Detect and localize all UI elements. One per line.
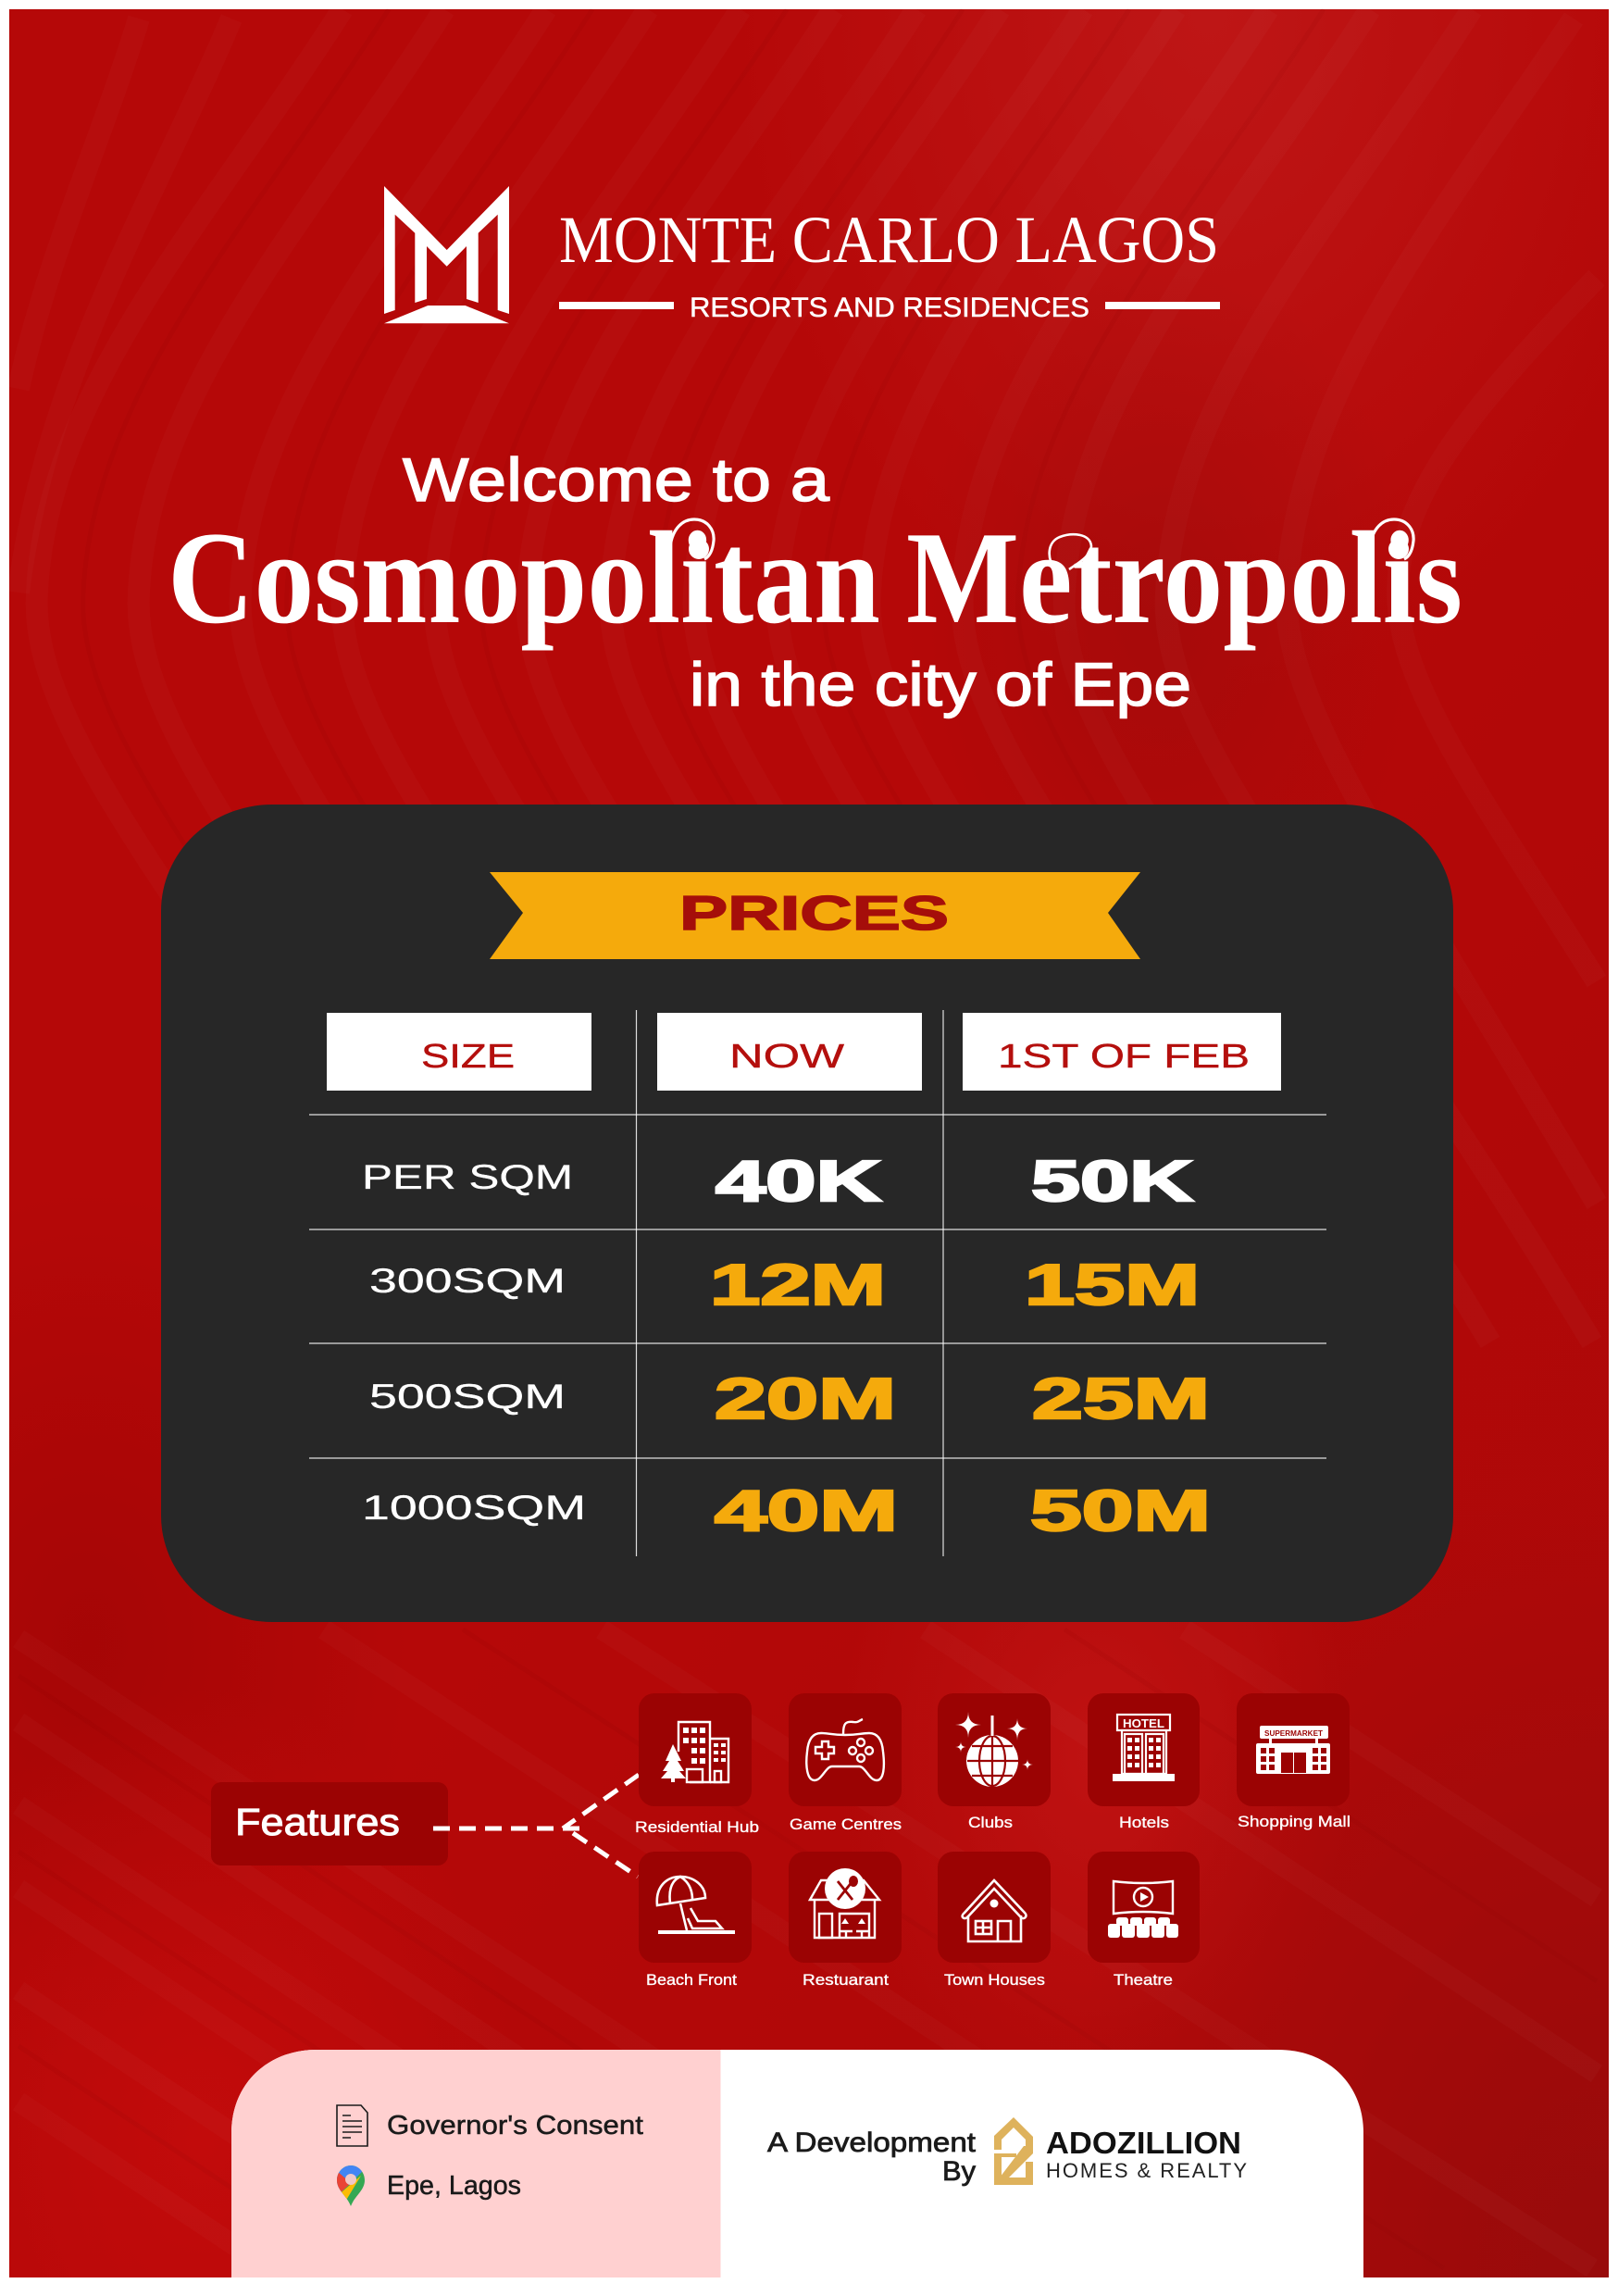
heading line: Welcome to a: Welcome to a — [403, 445, 829, 514]
table grid — [309, 1010, 1326, 1556]
row labels: 300SQM — [369, 1262, 566, 1300]
text: A Development By: By — [942, 2156, 976, 2187]
feature: Town Houses — [938, 1852, 1051, 1989]
feature: Theatre: Theatre — [1114, 1971, 1173, 1989]
feature: Hotels — [1088, 1693, 1200, 1831]
logo: Adozillion: HOMES & REALTY — [1046, 2159, 1247, 2182]
brand name: MONTE CARLO LAGOS — [559, 203, 1219, 277]
text: A Development By: A Development — [767, 2128, 977, 2158]
icon: map pin — [337, 2165, 365, 2206]
feature: Restuarant — [789, 1852, 902, 1989]
arrow: dashed connector — [433, 1775, 639, 1877]
per sqm prices: 40K — [716, 1150, 881, 1214]
banner: PRICES: PRICES — [679, 887, 949, 941]
feature: Residential Hub — [635, 1693, 759, 1836]
features label: Features — [235, 1801, 400, 1843]
plot prices: 50M — [1030, 1479, 1211, 1543]
feature: Town Houses: Town Houses — [944, 1971, 1045, 1989]
feature: Clubs: Clubs — [968, 1814, 1013, 1831]
feature: Residential Hub: Residential Hub — [635, 1818, 759, 1836]
feature: Shopping Mall — [1237, 1693, 1350, 1830]
panel: prices — [161, 805, 1453, 1622]
title: Cosmopolitan Metropolis: Cosmopolitan — [168, 505, 880, 651]
logo: Adozillion — [994, 2117, 1247, 2185]
feature: Theatre — [1088, 1852, 1200, 1989]
row labels — [362, 1158, 586, 1527]
feature: Shopping Mall: Shopping Mall — [1238, 1813, 1350, 1830]
column headers — [327, 1013, 1281, 1091]
feature: Beach Front — [639, 1852, 752, 1989]
column headers: SIZE — [421, 1037, 515, 1075]
panel: features — [211, 1693, 1350, 1989]
tagline with rules — [559, 293, 1220, 323]
column headers: NOW — [729, 1037, 844, 1075]
icon: document — [337, 2105, 367, 2146]
feature: Hotels: HOTEL — [1123, 1716, 1164, 1730]
column headers: 1ST OF FEB — [998, 1037, 1250, 1075]
icon: M monogram — [384, 186, 509, 323]
feature: Clubs — [938, 1693, 1051, 1831]
plot prices: 20M — [715, 1367, 896, 1431]
title: Cosmopolitan Metropolis — [168, 505, 1462, 651]
feature: Hotels: Hotels — [1119, 1814, 1169, 1831]
feature: Game Centres — [789, 1693, 902, 1833]
per sqm prices: 50K — [1031, 1150, 1193, 1214]
plot prices: 25M — [1032, 1367, 1210, 1431]
text: A Development By — [767, 2128, 977, 2187]
feature: Restuarant: Restuarant — [803, 1971, 889, 1989]
row labels: PER SQM — [362, 1158, 573, 1196]
feature: Shopping Mall: SUPERMARKET — [1264, 1729, 1323, 1738]
title: Cosmopolitan Metropolis: Metropolis — [906, 505, 1462, 651]
plot prices: 40M — [715, 1479, 898, 1543]
row labels: 1000SQM — [362, 1489, 586, 1527]
plot prices: 15M — [1025, 1254, 1200, 1317]
logo: Monte Carlo Lagos — [384, 186, 1220, 323]
heading line: in the city of Epe: in the city of Epe — [690, 650, 1191, 718]
plot prices — [710, 1254, 1211, 1543]
panel: footer — [231, 2050, 1363, 2277]
plot prices: 12M — [710, 1254, 886, 1317]
row labels: 500SQM — [369, 1378, 566, 1416]
heading — [168, 445, 1462, 718]
logo: Adozillion: ADOZILLION — [1046, 2126, 1241, 2160]
text: Governor's Consent: Governor's Consent — [387, 2111, 643, 2140]
per sqm prices — [716, 1150, 1193, 1214]
banner: PRICES — [490, 872, 1140, 959]
tagline with rules: RESORTS AND RESIDENCES — [690, 293, 1089, 323]
feature: Game Centres: Game Centres — [790, 1816, 902, 1833]
text: Epe, Lagos: Epe, Lagos — [387, 2171, 521, 2201]
feature: Beach Front: Beach Front — [646, 1971, 737, 1989]
features label — [211, 1782, 448, 1866]
